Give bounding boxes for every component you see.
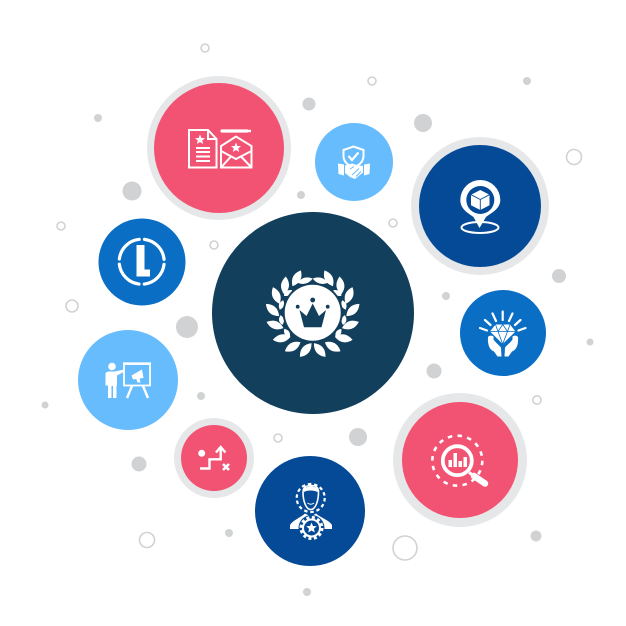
- icon: employee with star gear: [290, 484, 332, 541]
- panel: logo L bubble: [98, 218, 186, 306]
- panel: central crown bubble: [212, 212, 414, 414]
- icon: shield and handshake: [338, 146, 370, 179]
- icon: magnifier over bar chart: [432, 436, 485, 486]
- icon: document and envelope: [189, 130, 252, 168]
- panel: diamond bubble: [460, 290, 546, 376]
- icon: stairs with arrow and cross: [198, 447, 229, 470]
- panel: documents bubble: [147, 76, 291, 220]
- panel: data analysis bubble: [393, 393, 527, 527]
- panel: person with gear bubble: [255, 456, 365, 566]
- panel: presentation bubble: [78, 330, 178, 430]
- icon: location pin with box: [460, 180, 500, 233]
- icon: crown in laurel wreath: [263, 268, 362, 359]
- icon: letter L in dashed ring: [119, 239, 164, 284]
- panel: location bubble: [411, 137, 549, 275]
- panel: stairs bubble: [174, 418, 254, 498]
- icon: person at presentation board: [106, 363, 151, 398]
- panel: handshake bubble: [315, 123, 393, 201]
- icon: diamond in hands: [480, 312, 526, 356]
